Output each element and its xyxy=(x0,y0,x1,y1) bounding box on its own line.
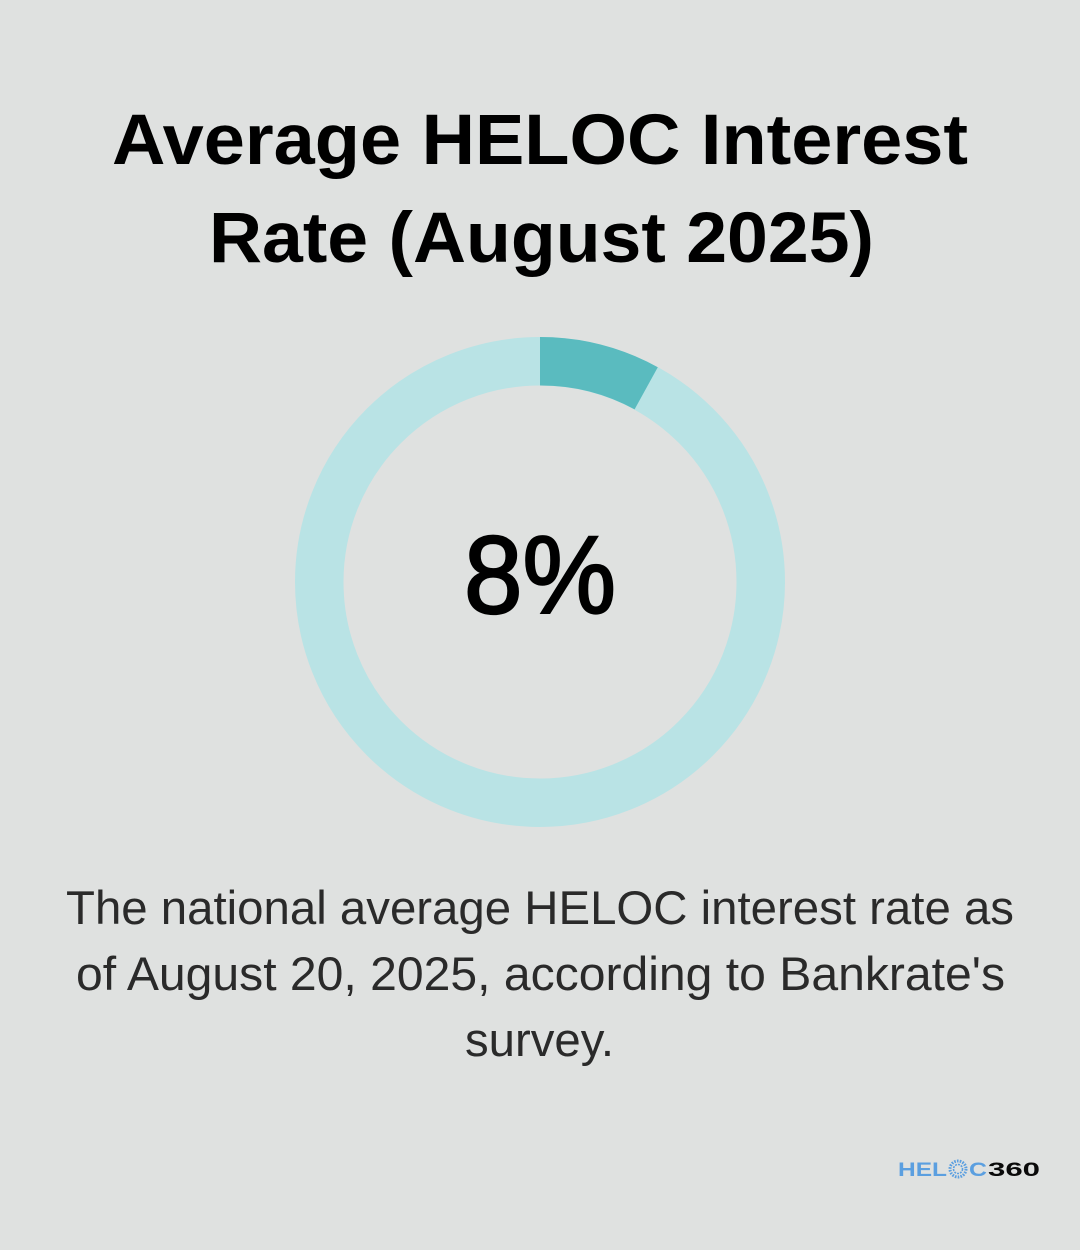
description text: of August 20, 2025, according to Bankrate's xyxy=(76,947,1005,1000)
description text: survey. xyxy=(465,1013,614,1066)
title: Average HELOC Interest xyxy=(112,101,968,180)
donut highlighted segment: 8% xyxy=(540,337,658,409)
logo: HELOC360 xyxy=(898,1160,1040,1181)
logo wordmark 360: 360 xyxy=(988,1160,1040,1181)
description text: The national average HELOC interest rate as xyxy=(66,881,1014,934)
donut value: 8% xyxy=(464,514,616,637)
donut track xyxy=(319,361,761,803)
title: Rate (August 2025) xyxy=(209,199,874,278)
logo wordmark C: C xyxy=(969,1160,987,1181)
logo wordmark HEL: HEL xyxy=(898,1160,948,1181)
description text xyxy=(66,881,1014,1066)
donut chart xyxy=(319,337,761,803)
logo swirl O icon xyxy=(950,1161,966,1177)
title xyxy=(112,101,968,278)
